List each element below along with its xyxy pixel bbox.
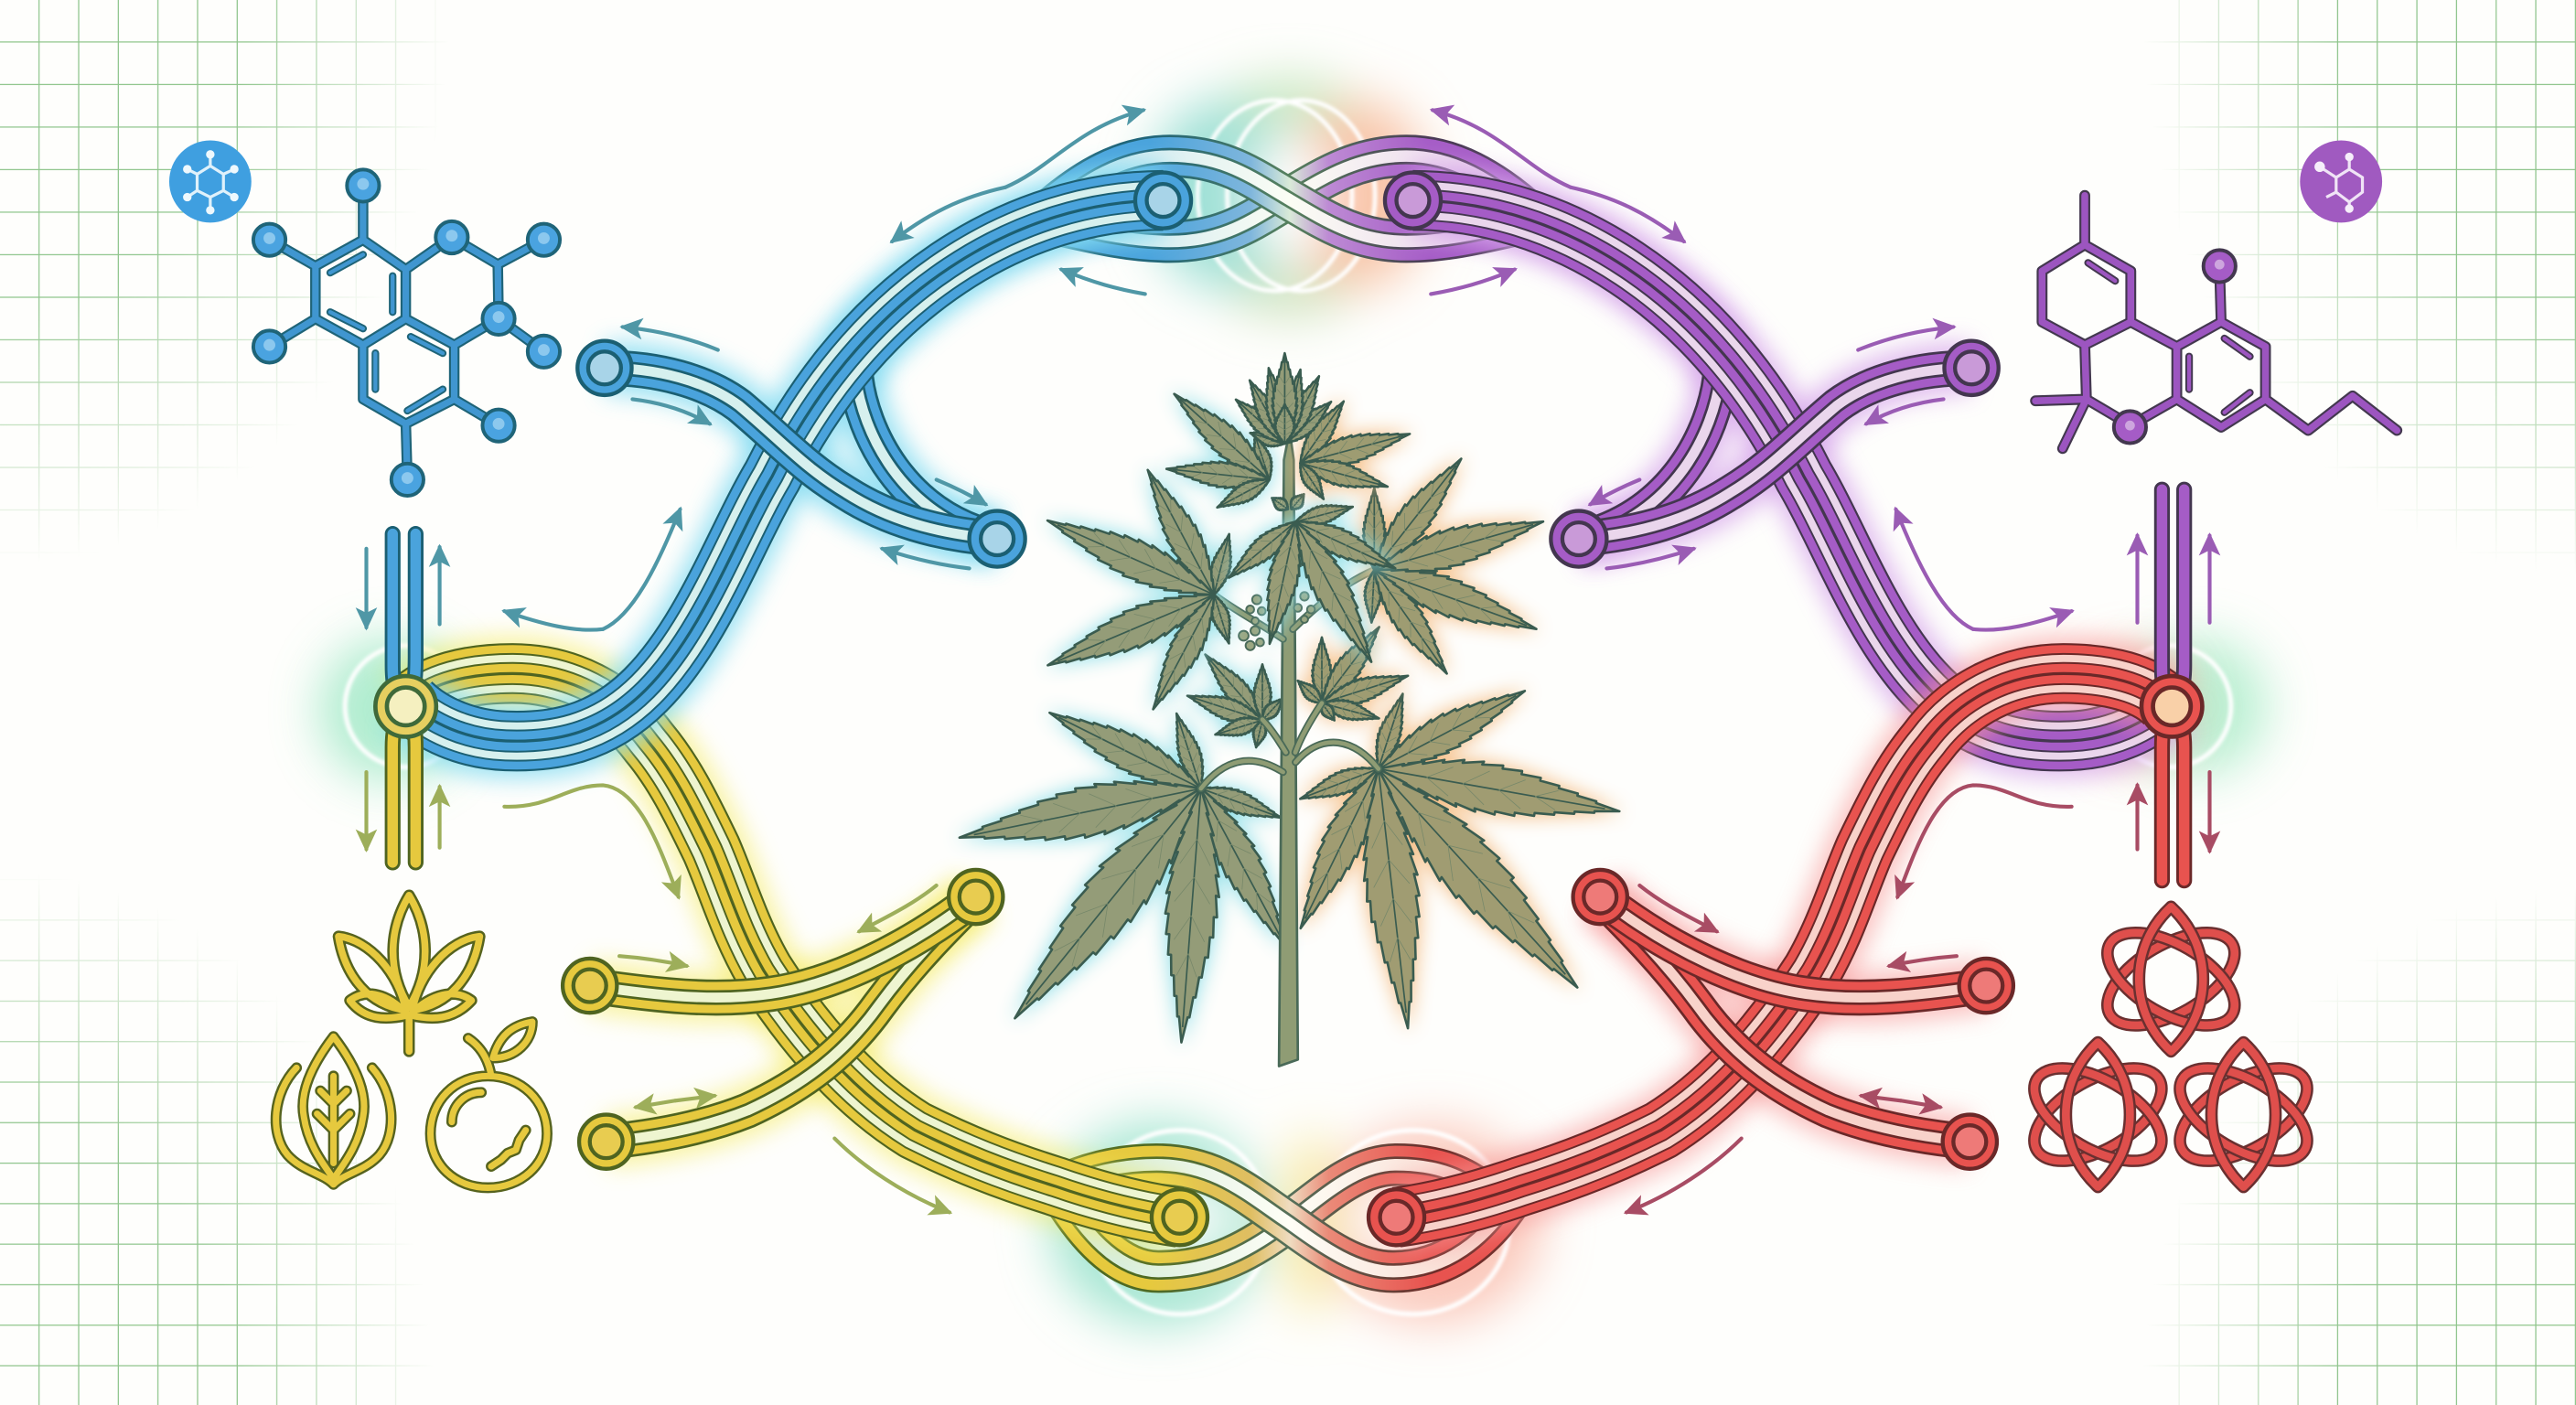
icon: knot left bbox=[2020, 1043, 2176, 1187]
badge: purple molecule bbox=[2300, 141, 2382, 222]
main stem and branches bbox=[1201, 431, 1379, 1067]
glow: bottom junction bbox=[1050, 1122, 1541, 1325]
yellow strand network bbox=[411, 673, 1208, 1245]
bottom twist: yellow to red ribbons bbox=[1059, 1164, 1517, 1271]
arrows: blue flow bbox=[366, 110, 1145, 630]
flavonoid knot icons bbox=[2020, 906, 2322, 1187]
glow: top junction bbox=[1148, 79, 1429, 316]
leaf: lower left bbox=[954, 696, 1304, 1045]
leaf: middle left bbox=[1039, 462, 1239, 716]
blue strand network bbox=[411, 173, 1191, 741]
arrows: red flow bbox=[1626, 772, 2210, 1212]
leaf: apex cluster bbox=[1229, 353, 1337, 451]
glow: left junction bbox=[318, 638, 467, 782]
purple strand network bbox=[1385, 173, 2165, 741]
terpene icons: leaf, herb, fruit bbox=[276, 896, 547, 1187]
leaf: upper centre bbox=[1221, 498, 1401, 670]
red strand network bbox=[1368, 673, 2165, 1245]
leaf: top right bbox=[1292, 395, 1413, 503]
leaf: small lower left bbox=[1184, 647, 1287, 749]
arrows: yellow flow bbox=[366, 772, 950, 1212]
top twist: blue to purple ribbons bbox=[1038, 156, 1538, 241]
leaf: small lower right bbox=[1293, 619, 1411, 727]
central cannabis plant bbox=[954, 353, 1624, 1067]
icon: knot right bbox=[2165, 1043, 2322, 1187]
badge: blue molecule bbox=[169, 141, 252, 222]
leaf: top left bbox=[1164, 382, 1280, 516]
left vertical strands and junction node bbox=[375, 534, 436, 863]
icon: cannabis leaf bbox=[338, 896, 479, 1051]
icon: citrus fruit bbox=[431, 1022, 547, 1187]
purple molecule structure bbox=[2035, 196, 2397, 448]
right vertical strands and junction node bbox=[2141, 489, 2202, 881]
arrows: purple flow bbox=[1431, 110, 2210, 630]
leaf: lower right bbox=[1283, 674, 1624, 1032]
blue molecule structure bbox=[253, 169, 560, 496]
icon: knot top bbox=[2093, 906, 2249, 1051]
leaf: middle right bbox=[1361, 448, 1549, 682]
flower buds bbox=[1239, 490, 1315, 650]
glow: right junction bbox=[2080, 638, 2267, 776]
icon: herb leaf bbox=[276, 1036, 392, 1185]
